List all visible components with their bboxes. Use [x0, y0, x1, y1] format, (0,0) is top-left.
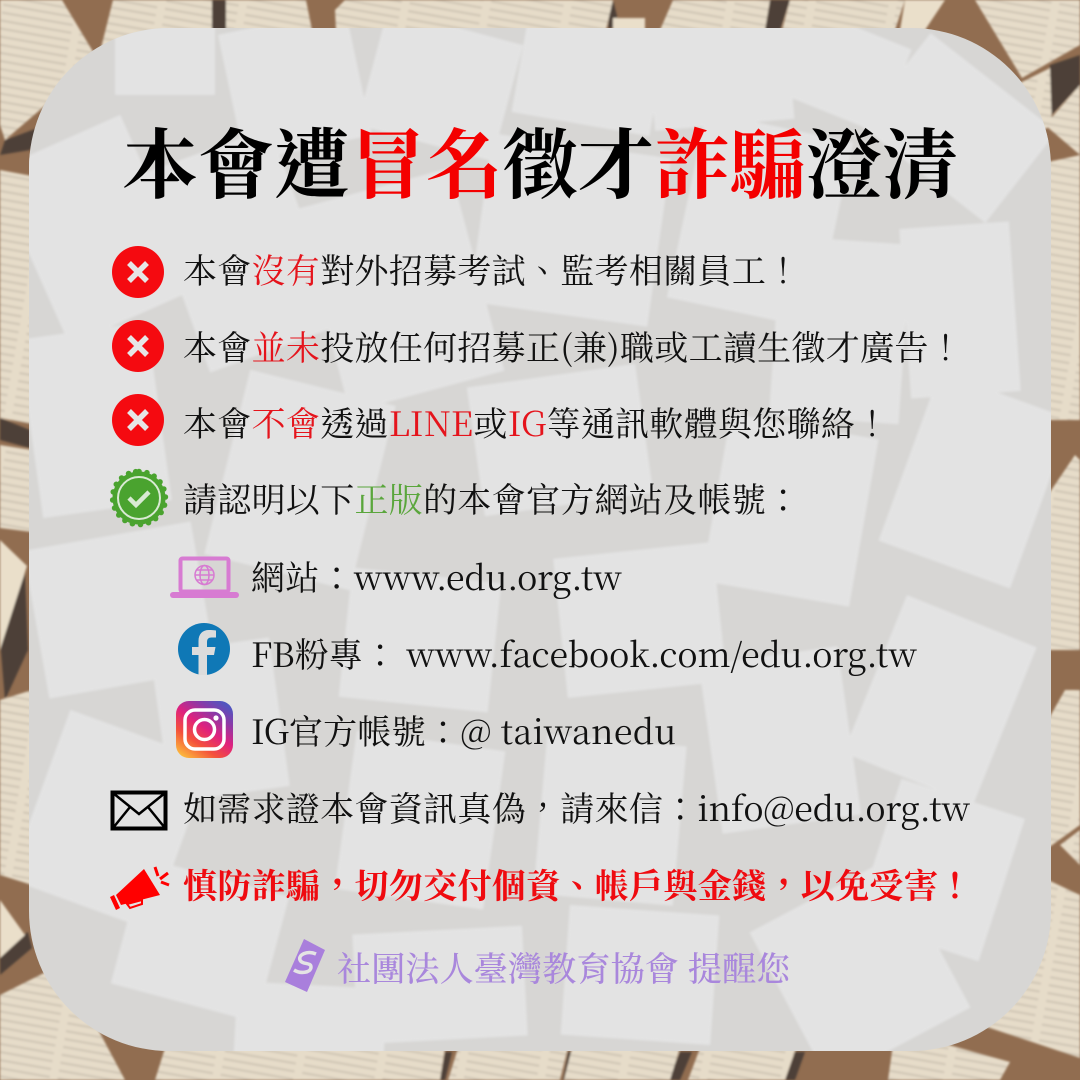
statement 3: 本會不會透過LINE或IG等通訊軟體與您聯絡！ — [183, 397, 890, 446]
warning line: 慎防詐騙，切勿交付個資、帳戶與金錢，以免受害！ — [183, 859, 972, 908]
icon: laptop with globe — [170, 556, 239, 598]
icon: red cross 2 — [112, 320, 164, 372]
icon: facebook — [178, 623, 230, 675]
instagram line: IG官方帳號：@ taiwanedu — [251, 705, 677, 754]
website line: 網站：www.edu.org.tw — [251, 551, 622, 600]
facebook line: FB粉專： www.facebook.com/edu.org.tw — [251, 628, 917, 677]
statement 2: 本會並未投放任何招募正(兼)職或工讀生徵才廣告！ — [183, 321, 963, 370]
contact line: 如需求證本會資訊真偽，請來信：info@edu.org.tw — [183, 782, 970, 831]
icon: green verified badge — [110, 468, 168, 528]
icon: envelope — [110, 790, 168, 830]
title: 本會遭冒名徵才詐騙澄清 — [122, 105, 958, 214]
icon: red megaphone — [110, 866, 170, 910]
logo: association mark — [285, 939, 325, 992]
statement 1: 本會沒有對外招募考試、監考相關員工！ — [183, 244, 800, 293]
signature: 社團法人臺灣教育協會 提醒您 — [337, 942, 790, 991]
icon: red cross 1 — [112, 246, 164, 298]
icon: instagram — [176, 701, 233, 758]
icon: red cross 3 — [112, 394, 164, 446]
statement 4: 請認明以下正版的本會官方網站及帳號： — [183, 473, 800, 522]
